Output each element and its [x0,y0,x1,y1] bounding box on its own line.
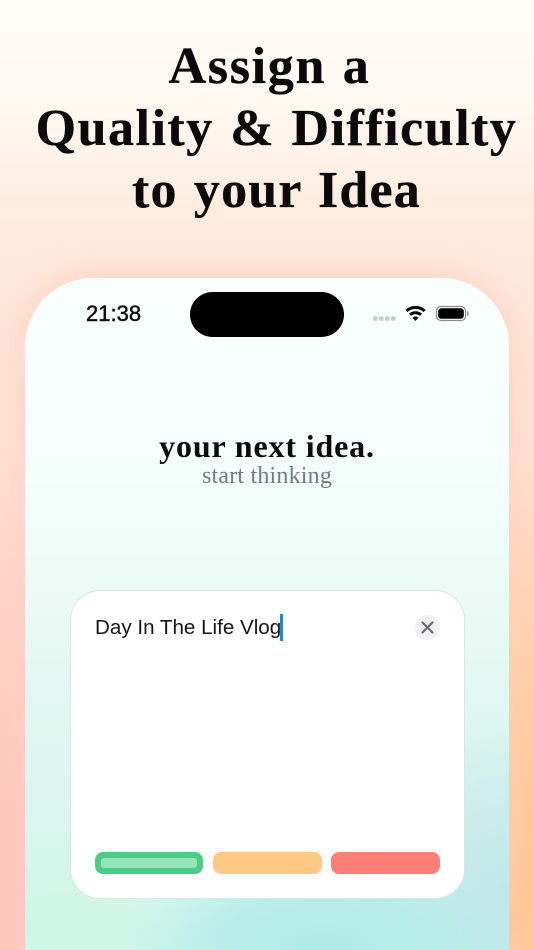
icon: clear button [415,615,440,640]
phone glow [25,278,509,918]
panel: phone screen [25,278,509,950]
selected inner bar [101,858,197,868]
icon: signal dots [373,316,396,321]
title: to your Idea [132,162,421,219]
quality option: green selected [95,852,203,874]
quality option: orange [213,852,322,874]
icon: wifi [405,306,426,321]
heading: your next idea. [159,428,375,464]
text cursor [280,614,283,641]
quality option: red [331,852,440,874]
dynamic island [190,292,344,337]
title [36,38,517,219]
input text: Day In The Life Vlog [95,616,281,639]
icon: battery [436,306,468,322]
subheading: start thinking [202,463,332,489]
panel: idea input card [70,590,465,899]
status bar time: 21:38 [86,301,141,326]
title: Assign a [168,38,370,95]
title: Quality & Difficulty [36,100,517,157]
